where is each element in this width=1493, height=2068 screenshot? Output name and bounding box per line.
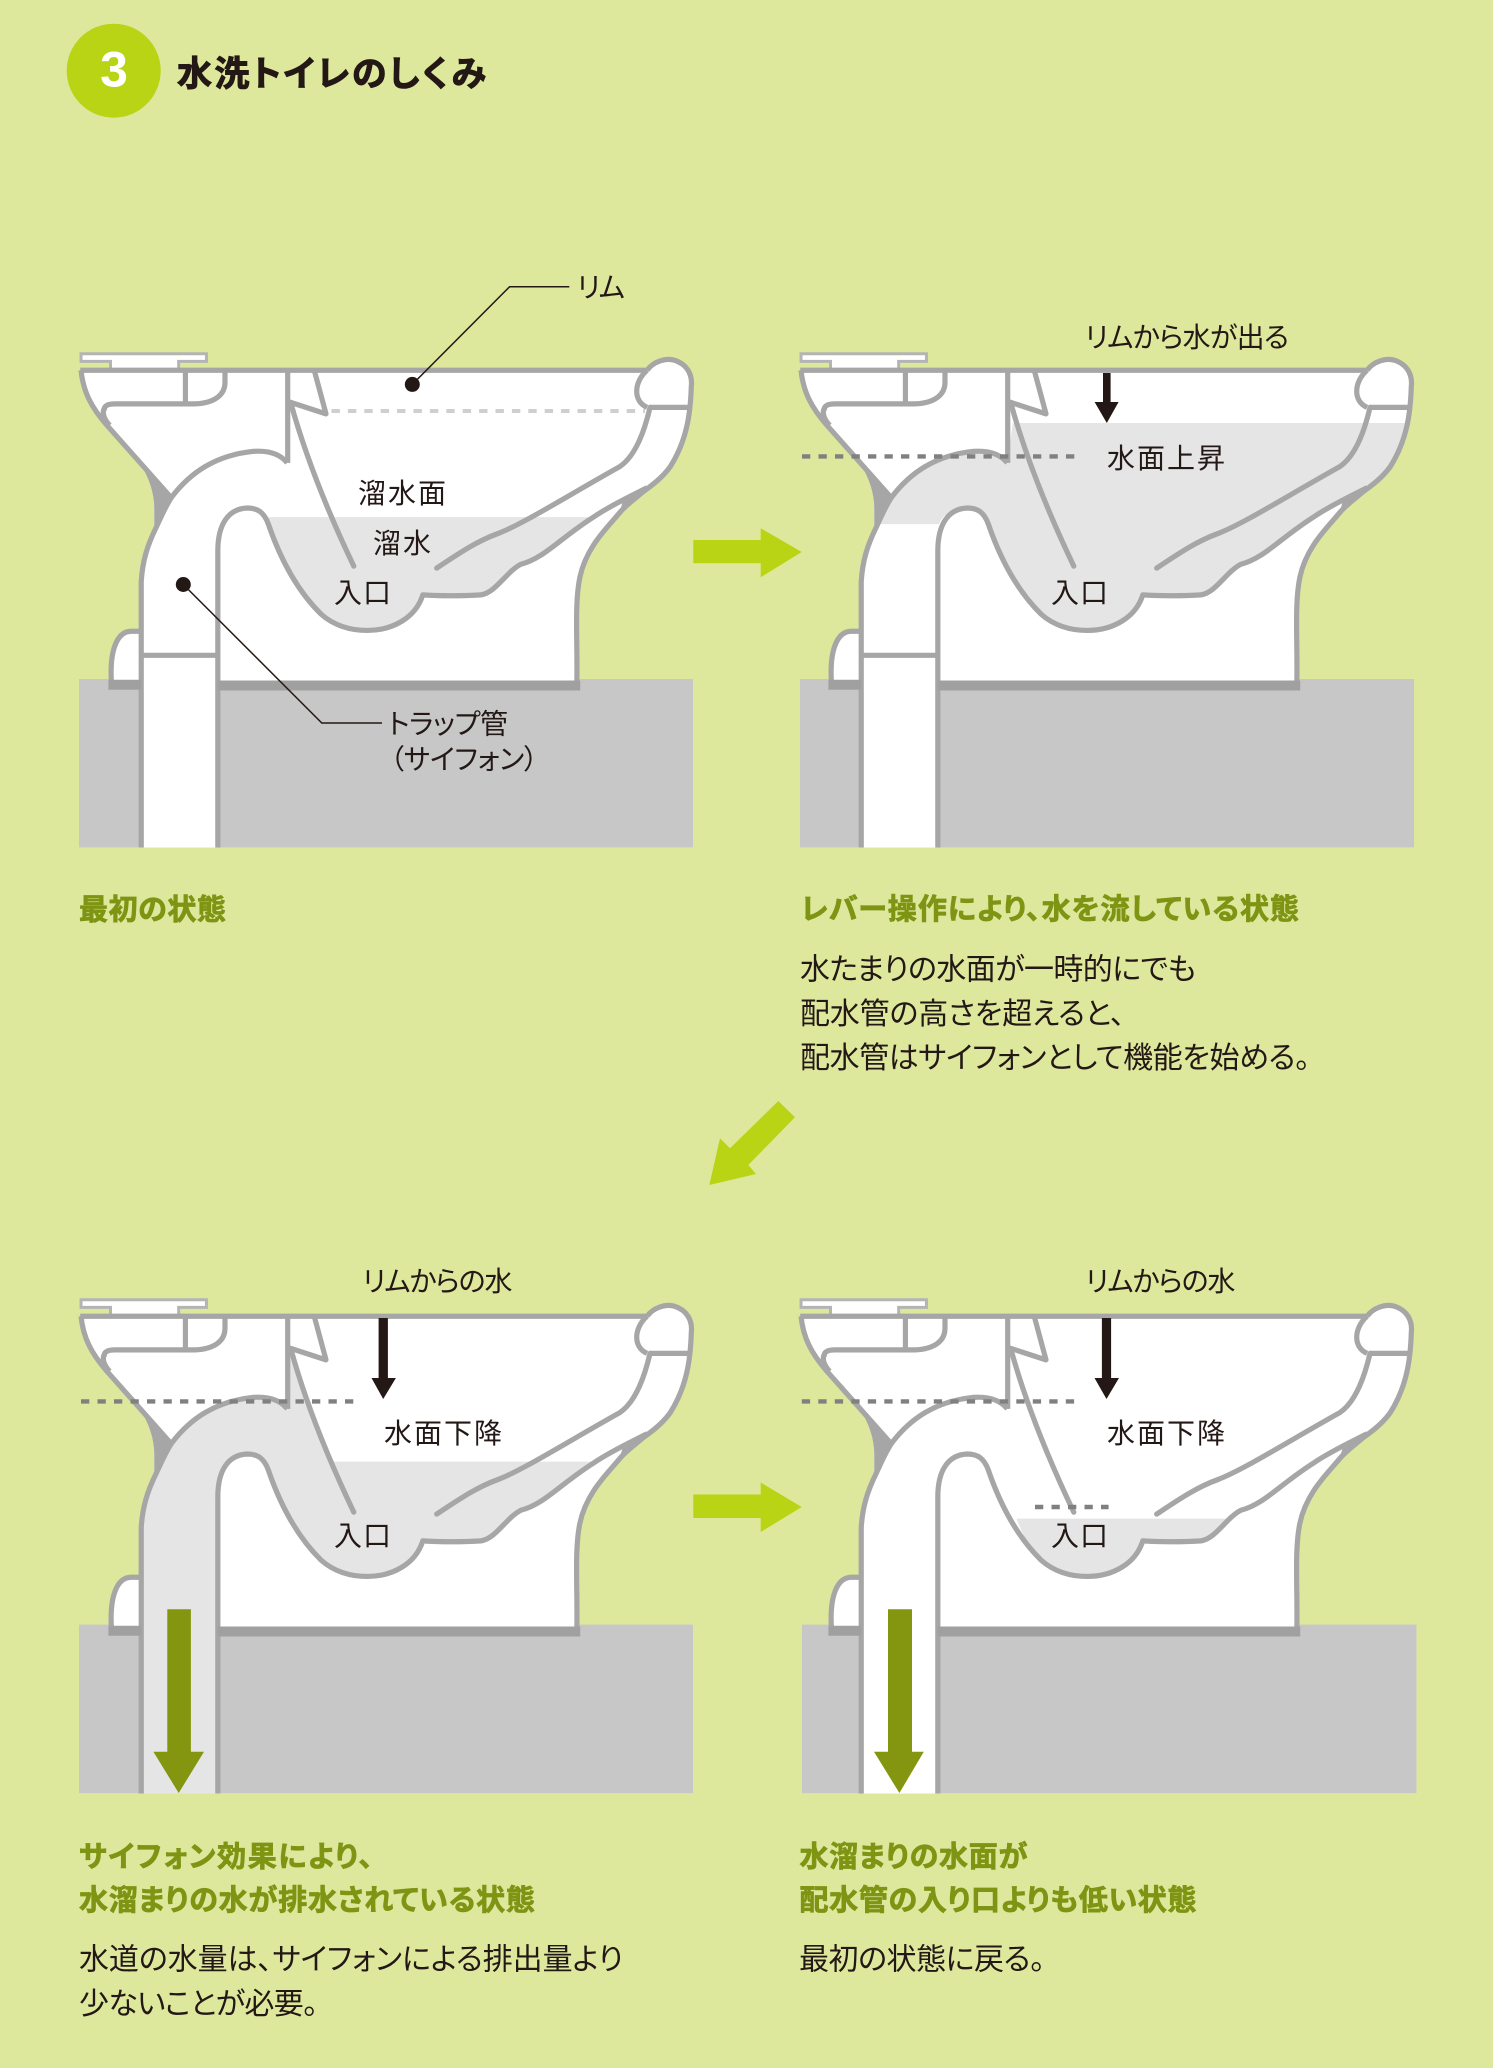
label: inlet: 入口 [334,578,391,608]
text block: end state: 配水管の入り口よりも低い状態 [800,1884,1196,1917]
dashed line: drain height [81,1399,355,1404]
panel: siphon state toilet diagram [79,1266,693,1793]
arrow: drain flow [153,1609,204,1793]
text block: siphon state: 水溜まりの水が排水されている状態 [79,1883,535,1917]
callout: trap pipe leader: トラップ管 [388,708,508,740]
text block: flushing state: 配水管の高さを超えると、 [800,998,1125,1031]
header badge: number 3 [67,24,161,118]
header badge: number 3: 3 [100,42,128,98]
label: pooled water: 溜水 [373,528,431,559]
arrow: panel 1 to panel 2 [693,528,802,577]
title: 水洗トイレのしくみ [177,55,486,94]
arrow: water from rim [1095,373,1119,423]
arrow: diagonal to panel 3 [709,1101,795,1185]
text block: siphon state: 水道の水量は、サイフォンによる排出量より [79,1944,623,1976]
arrow: water from rim [1094,1318,1119,1399]
label: water from rim: リムからの水 [1086,1266,1236,1297]
callout: rim leader [405,272,625,392]
text block: end state: 最初の状態に戻る。 [799,1944,1045,1976]
label: inlet: 入口 [334,1520,391,1552]
label: inlet: 入口 [1051,1520,1108,1552]
heading: initial state: 最初の状態 [79,894,226,926]
label: water surface: 溜水面 [358,478,446,509]
callout: rim leader: リム [577,272,625,303]
dashed line: drain height [802,454,1075,459]
arrow: drain flow [874,1609,924,1793]
arrow: water from rim [372,1318,396,1399]
text block: siphon state: 少ないことが必要。 [79,1988,318,2021]
panel: flushing state toilet diagram [800,322,1414,847]
dashed line: drain height [802,1399,1075,1404]
label: water level falls: 水面下降 [1107,1418,1225,1449]
panel: initial state toilet diagram [79,272,693,847]
text block: siphon state [79,1840,623,2021]
text block: flushing state: レバー操作により、水を流している状態 [801,893,1299,926]
text block: end state [799,1840,1196,1976]
text block: end state: 水溜まりの水面が [800,1840,1028,1874]
label: water level rises: 水面上昇 [1107,443,1225,474]
text block: flushing state: 配水管はサイフォンとして機能を始める。 [800,1042,1310,1075]
text block: flushing state: 水たまりの水面が一時的にでも [800,954,1196,986]
callout: trap pipe leader: （サイフォン） [390,744,538,775]
label: water from rim: リムから水が出る [1085,322,1289,353]
dashed line: inlet height [1035,1505,1109,1509]
label: water from rim: リムからの水 [362,1266,512,1297]
arrow: panel 3 to panel 4 [693,1482,802,1532]
label: inlet: 入口 [1051,578,1108,608]
panel: end state toilet diagram [800,1266,1416,1793]
text block: flushing state [800,893,1310,1075]
callout: trap pipe leader [176,577,538,775]
text block: siphon state: サイフォン効果により、 [79,1840,373,1874]
label: water level falls: 水面下降 [384,1418,502,1449]
dashed line: rim height [332,409,645,413]
